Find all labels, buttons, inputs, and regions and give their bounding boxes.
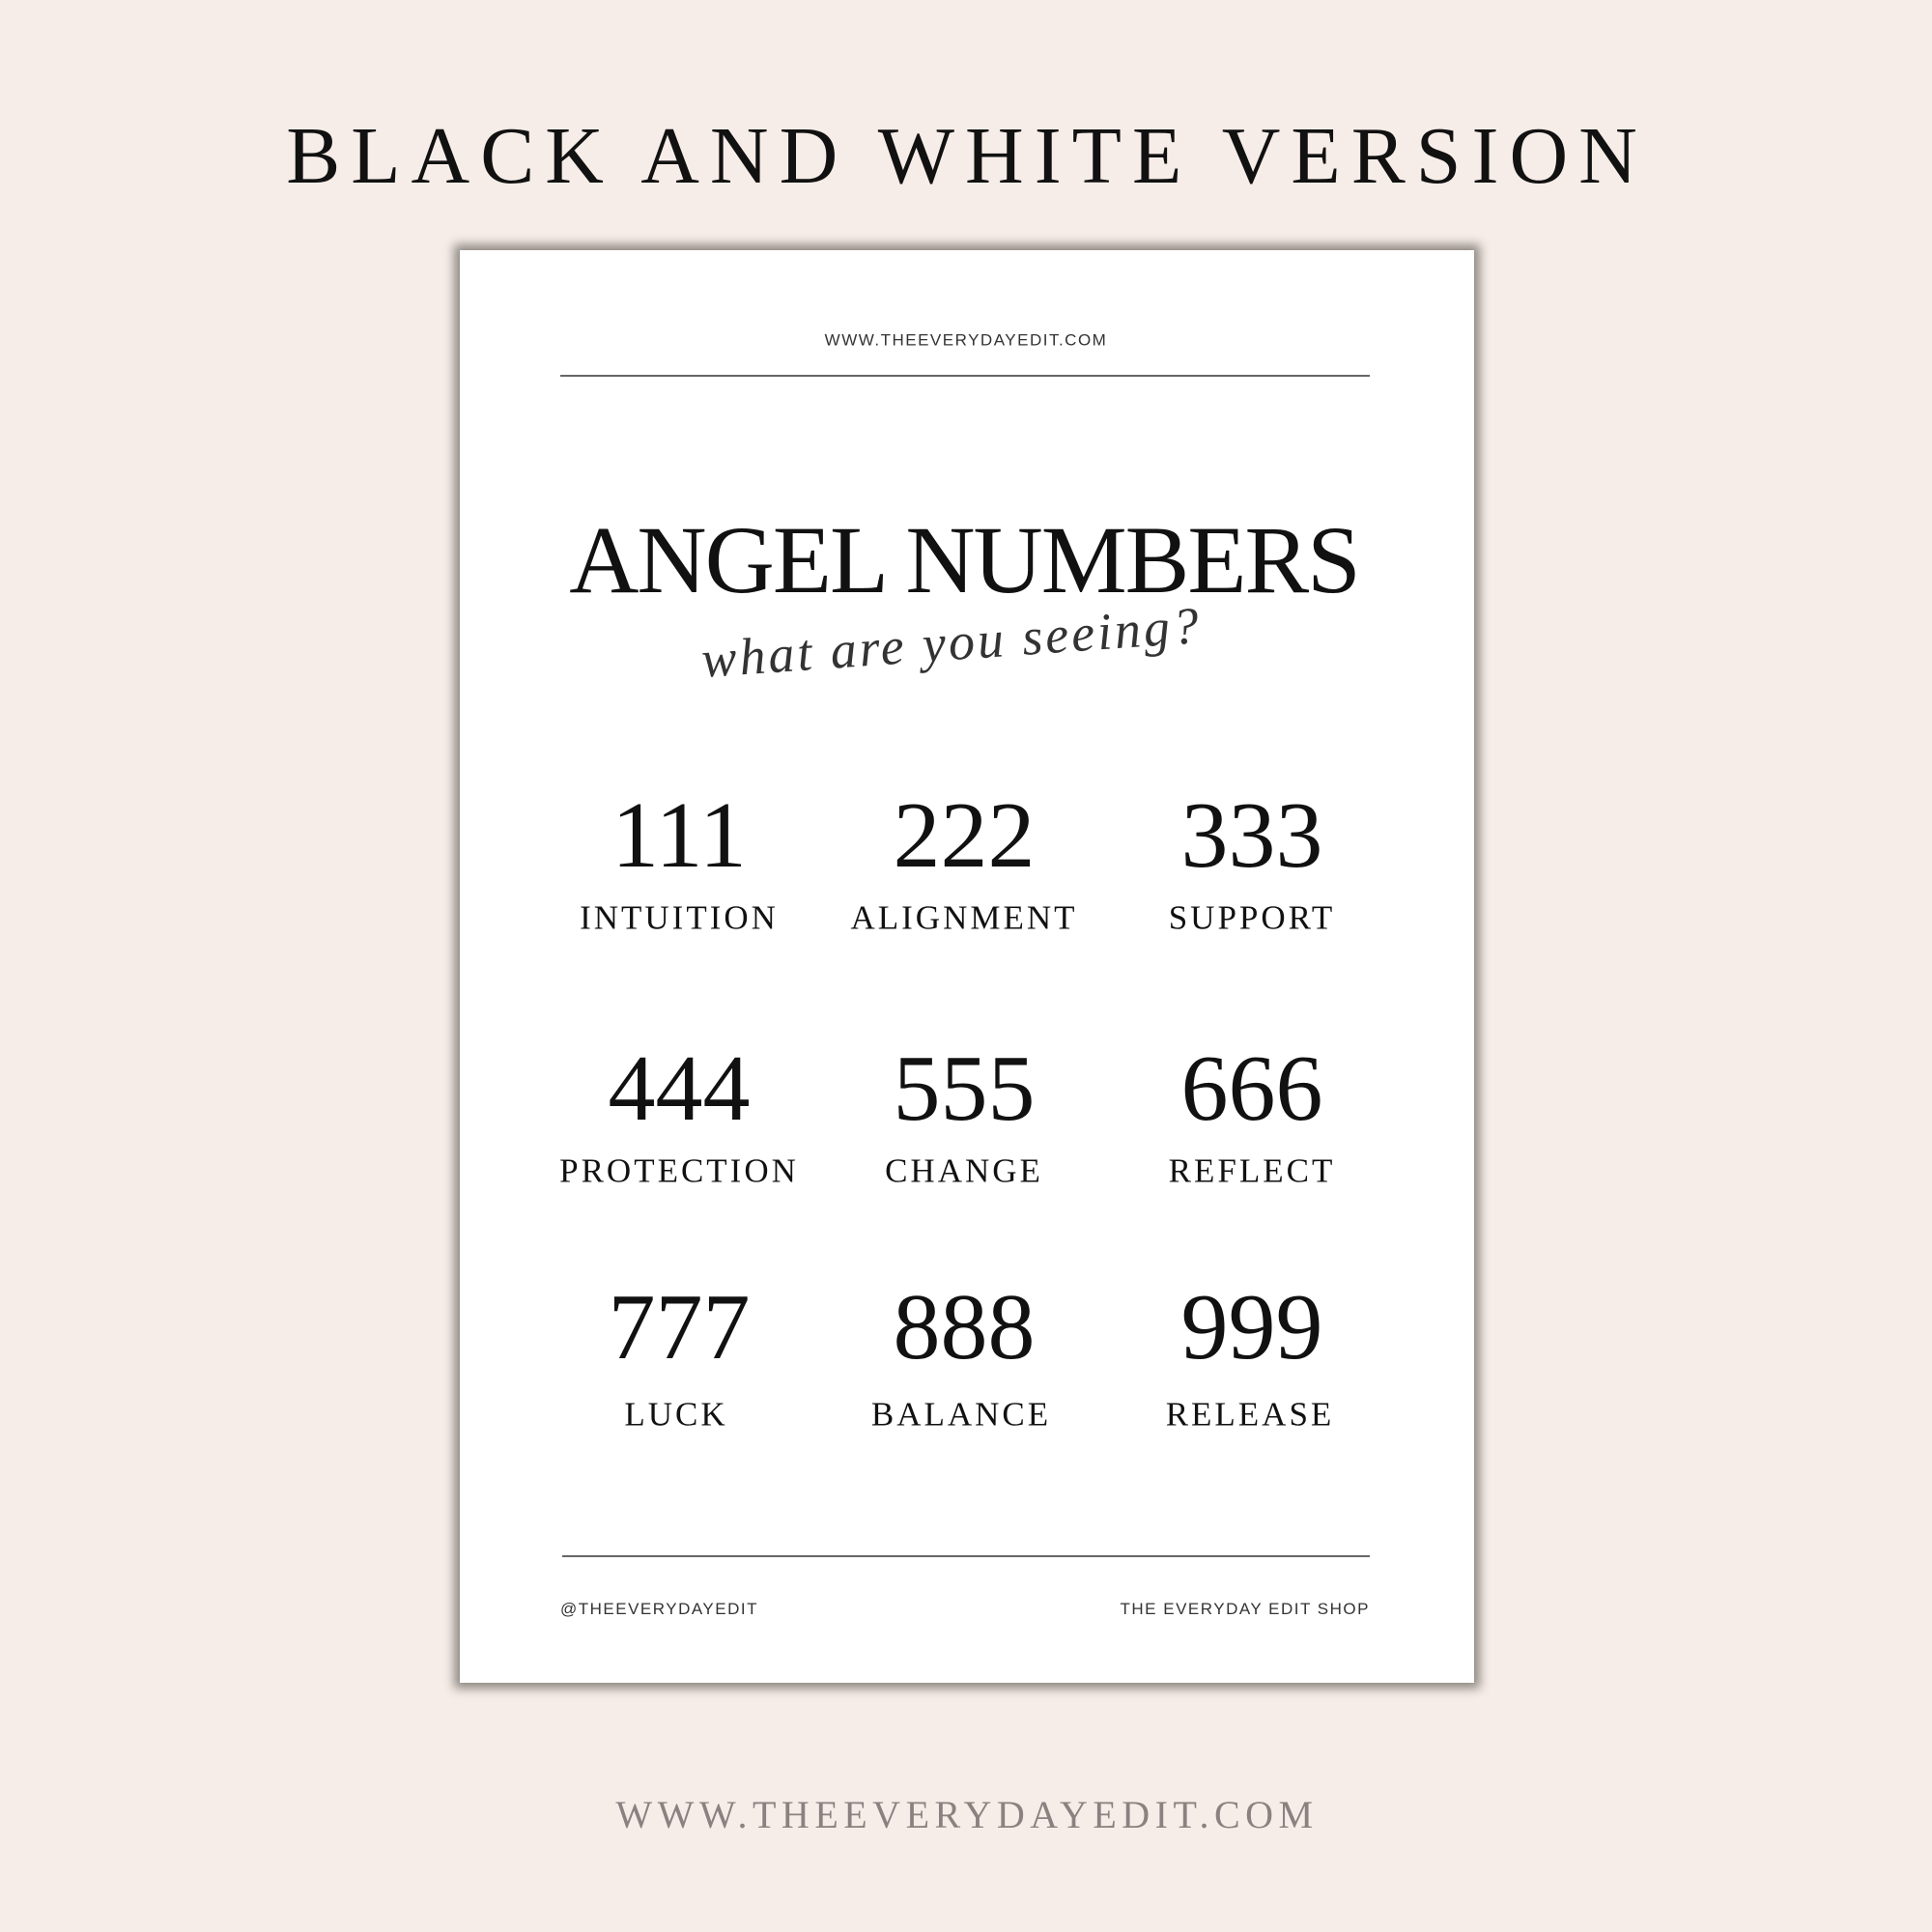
item 444 <box>559 1037 799 1190</box>
grid of numbers: PROTECTION <box>559 1151 799 1190</box>
grid of numbers: 444 <box>609 1037 750 1141</box>
grid of numbers: 666 <box>1180 1037 1323 1141</box>
item 888 <box>871 1275 1051 1434</box>
item 555 <box>885 1037 1043 1190</box>
grid of numbers: BALANCE <box>871 1395 1051 1434</box>
footer left: @THEEVERYDAYEDIT <box>560 1600 758 1618</box>
grid of numbers: LUCK <box>624 1395 728 1434</box>
bottom line <box>562 1555 1370 1557</box>
top url: WWW.THEEVERYDAYEDIT.COM <box>825 330 1107 350</box>
title: BLACK AND WHITE VERSION <box>286 111 1648 201</box>
item 333 <box>1169 783 1335 937</box>
grid of numbers: 888 <box>893 1275 1036 1379</box>
grid of numbers: 222 <box>893 783 1036 888</box>
grid of numbers: 333 <box>1180 783 1323 888</box>
top line <box>560 375 1370 377</box>
grid of numbers: SUPPORT <box>1169 898 1335 937</box>
grid of numbers: ALIGNMENT <box>850 898 1078 937</box>
grid of numbers: 555 <box>893 1037 1036 1141</box>
grid of numbers: RELEASE <box>1166 1395 1334 1434</box>
script subtitle: what are you seeing? <box>699 596 1204 689</box>
grid of numbers <box>559 783 1335 1434</box>
item 999 <box>1166 1275 1334 1434</box>
item 666 <box>1169 1037 1335 1190</box>
bottom url: WWW.THEEVERYDAYEDIT.COM <box>615 1793 1319 1836</box>
item 222 <box>850 783 1078 937</box>
grid of numbers: 111 <box>611 783 747 888</box>
item 111 <box>580 783 779 937</box>
grid of numbers: CHANGE <box>885 1151 1043 1190</box>
footer right: THE EVERYDAY EDIT SHOP <box>1121 1600 1370 1618</box>
grid of numbers: INTUITION <box>580 898 779 937</box>
item 777 <box>609 1275 750 1434</box>
grid of numbers: REFLECT <box>1169 1151 1335 1190</box>
heading: ANGEL NUMBERS <box>569 506 1359 613</box>
panel: poster card <box>460 250 1474 1683</box>
grid of numbers: 777 <box>609 1275 750 1379</box>
grid of numbers: 999 <box>1180 1275 1323 1379</box>
